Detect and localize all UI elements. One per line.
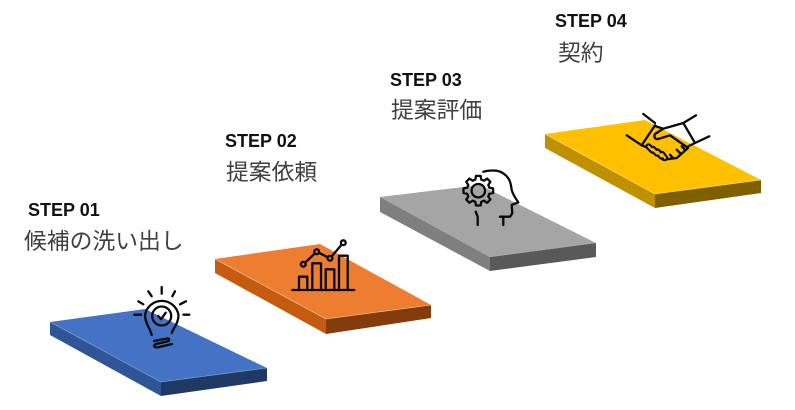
label: step 04: STEP 04: [555, 11, 627, 31]
label: step 02: 提案依頼: [226, 159, 317, 185]
icon: bar chart with trend line: [292, 240, 354, 290]
step 2: orange slab: [215, 244, 431, 334]
label: step 01: [24, 200, 184, 254]
label: step 01: STEP 01: [28, 200, 100, 220]
icon: handshake: [627, 114, 709, 160]
label: step 03: STEP 03: [390, 70, 462, 90]
step 3: gray slab: [380, 185, 596, 271]
label: step 03: 提案評価: [391, 97, 482, 123]
label: step 02: STEP 02: [225, 131, 297, 151]
label: step 04: [555, 11, 627, 66]
label: step 04: 契約: [558, 40, 604, 66]
label: step 03: [390, 70, 482, 123]
step 1: blue slab: [50, 309, 267, 396]
label: step 02: [225, 131, 317, 185]
label: step 01: 候補の洗い出し: [24, 228, 184, 254]
icon: head with gear: [464, 171, 518, 225]
step 4: yellow slab: [545, 120, 761, 208]
icon: light bulb with check: [134, 287, 189, 348]
